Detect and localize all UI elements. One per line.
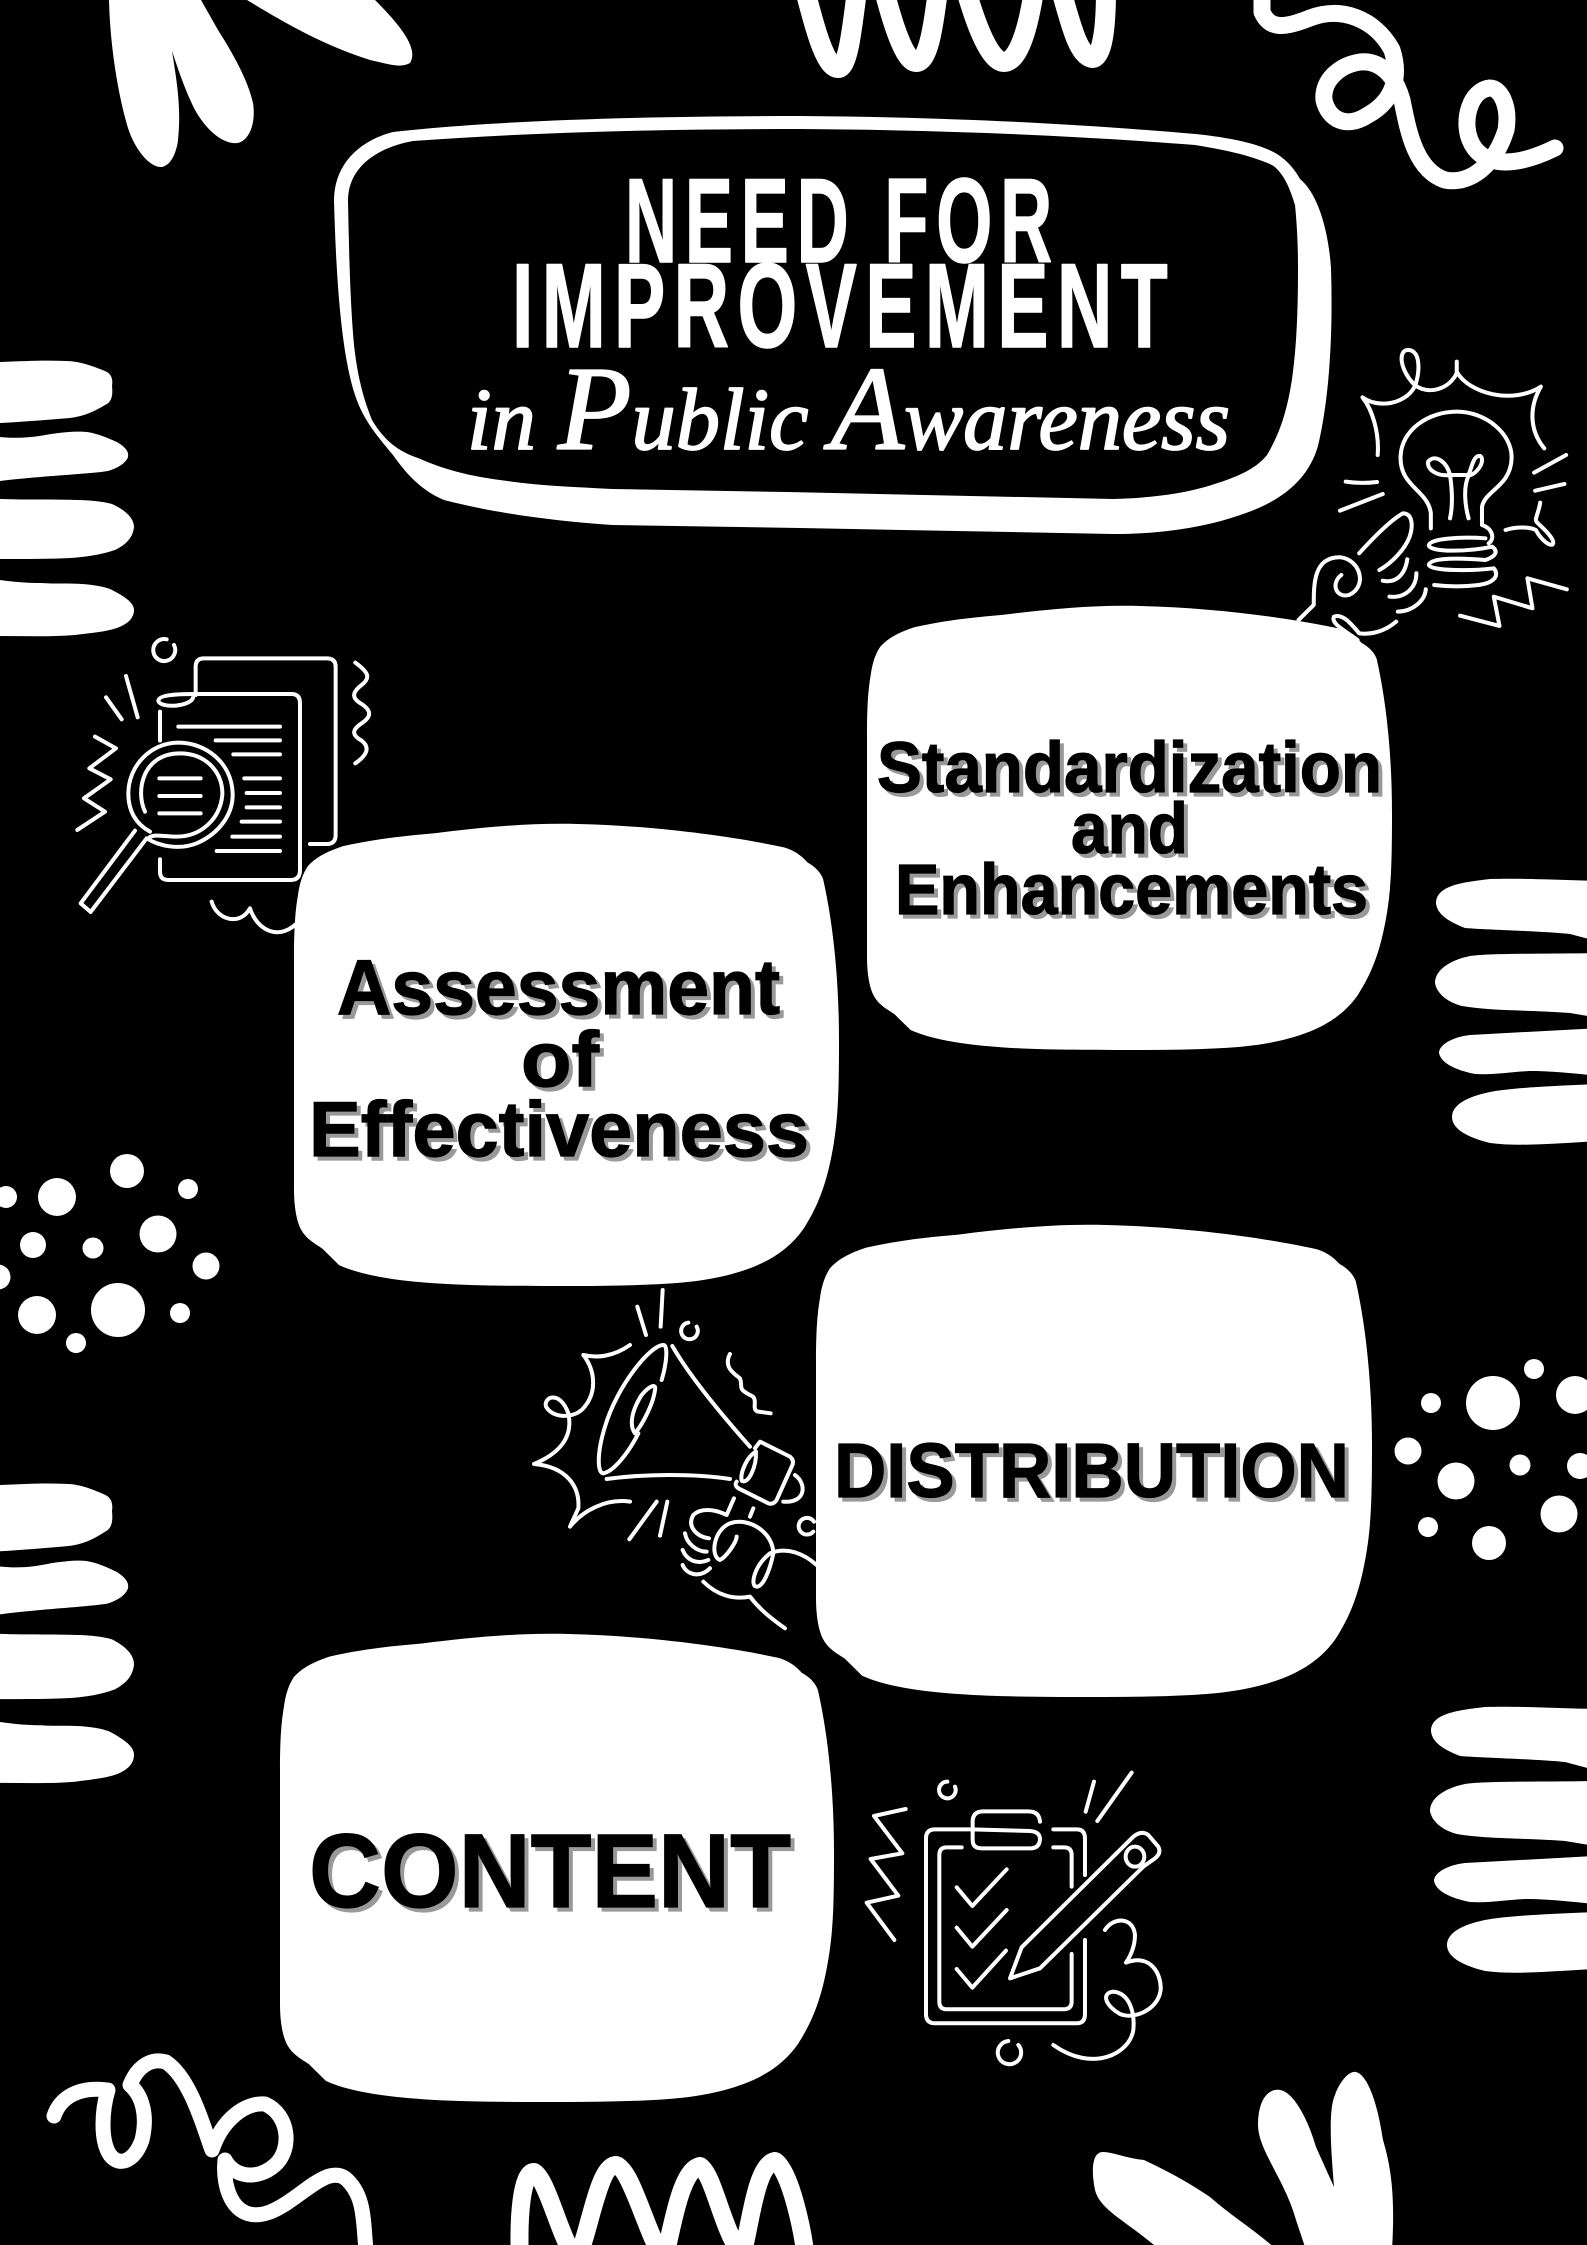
title line 1: NEED FOR [625, 154, 1060, 288]
panel: Standardization and Enhancements [867, 606, 1392, 1050]
decoration: top-right squiggle [1262, 0, 1555, 181]
panel: Content [280, 1634, 834, 2102]
decoration: right dots [1394, 1359, 1587, 1560]
label text: Standardization [877, 729, 1382, 808]
label text: Enhancements [895, 851, 1368, 930]
title frame [334, 116, 1332, 534]
decoration: top-left flower [109, 0, 412, 167]
panel: Distribution [816, 1225, 1372, 1697]
title script line: in Public Awareness [467, 342, 1230, 475]
icon: megaphone with hand [534, 1290, 817, 1628]
decoration: left stripes lower [0, 1483, 134, 1783]
icon: clipboard checklist with pencil [867, 1773, 1161, 2064]
title panel [334, 116, 1332, 534]
decoration: left dots [0, 1154, 220, 1353]
decoration: right stripes upper [1435, 879, 1587, 1145]
icon: document with magnifier [77, 639, 369, 932]
label text [309, 943, 809, 1173]
decoration: top zigzag [805, 0, 1106, 68]
icon: light bulb with hand [1299, 350, 1567, 640]
decoration: bottom-right flower [1093, 2072, 1393, 2245]
decoration: bottom-left squiggle [54, 2061, 366, 2245]
label text: of [521, 1015, 600, 1103]
label text [877, 729, 1382, 930]
decoration: right stripes lower [1430, 1707, 1587, 1973]
decoration: bottom zigzag [520, 2161, 806, 2245]
label text: DISTRIBUTION [834, 1428, 1349, 1514]
label text: CONTENT [309, 1813, 791, 1930]
decoration: left stripes upper [0, 361, 134, 636]
title line 2: IMPROVEMENT [512, 239, 1176, 373]
label text: Assessment [337, 943, 780, 1031]
label text: Effectiveness [309, 1085, 809, 1173]
label text: and [1071, 790, 1188, 869]
panel: Assessment of Effectiveness [294, 824, 839, 1286]
